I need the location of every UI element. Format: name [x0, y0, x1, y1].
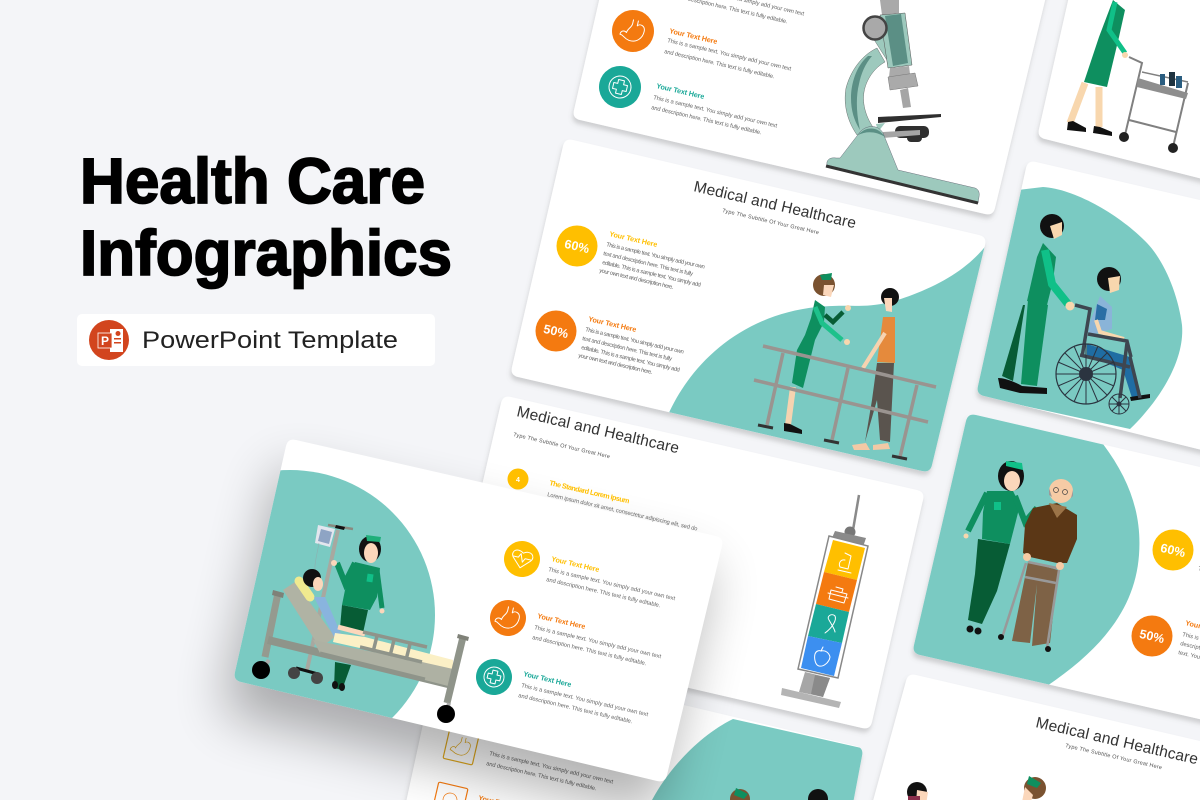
icon: apple [815, 647, 830, 666]
teal shape [640, 719, 870, 800]
text: teal item: Your Text Here [523, 669, 572, 689]
text: orange item: This is a sample text. You simply add your own text [534, 625, 662, 660]
illustration: nurse and patient at parallel bars [754, 273, 936, 459]
panel: syringe slide [450, 397, 923, 728]
text: orange item: This is a sample text. You simply add your own text [667, 38, 792, 73]
heading: Medical and Healthcare [1034, 714, 1200, 768]
panel: elderly care slide [905, 411, 1200, 726]
text: orange item: and description here. This text is fully editable. [532, 635, 647, 667]
text: orange item: Your Text Here [537, 611, 586, 631]
text: teal item [651, 81, 778, 136]
panel: wheelchair slide [970, 162, 1200, 457]
text: orange item: and description here. This text is fully editable. [664, 49, 775, 80]
illustration: syringe [781, 495, 868, 708]
stat: 60%: 60% [1159, 541, 1187, 560]
text: orange item: This is a sample text. You simply add your own [585, 327, 684, 356]
icon: cross circle [472, 655, 516, 699]
icon: microscope [838, 553, 851, 573]
text: teal item: This is a sample text. You simply add your own text [521, 683, 649, 718]
text: lower item: and description here. This text is fully editable. [486, 761, 597, 792]
illustration: nurse and elderly man with walker [964, 461, 1077, 652]
stat: 60% [556, 226, 598, 266]
icon: PowerPoint logo [89, 320, 129, 360]
teal shape [905, 411, 1139, 686]
badge: PowerPoint Template: PowerPoint Template [142, 327, 398, 354]
text: orange item: editable. This is a sample text. You simply add [581, 345, 680, 374]
icon: outlined stomach square [443, 729, 479, 765]
text: yellow item: Your Text Here [551, 554, 600, 574]
icon: teal cross circle [595, 62, 645, 112]
teal wave shape [668, 240, 990, 480]
teal circle [234, 470, 435, 718]
icon: outlined cross square [432, 782, 468, 800]
heading: Type The Subtitle Of Your Great Here [722, 208, 819, 236]
text: teal item: This is a sample text. You simply add your own text [653, 95, 778, 130]
text: orange item: Your Text Here [669, 26, 718, 46]
icon: ribbon [825, 615, 835, 633]
text: yellow item: editable. This is a sample text. You simply add [602, 260, 701, 289]
text: yellow item [599, 229, 705, 291]
title: Health Care Infographics: Health Care [80, 145, 425, 217]
title: Health Care Infographics [80, 145, 452, 289]
shadow: front slide [222, 468, 712, 800]
text: lower item: This is a sample text. You simply add your own text [489, 751, 614, 786]
heading: Medical and Healthcare [692, 178, 858, 232]
text: teal item: and description here. This text is fully editable. [651, 105, 762, 136]
heading: syringe slide: Type The Subtitle Of Your Great Here [513, 432, 610, 460]
illustration: figures [907, 776, 1120, 800]
text: standard lorem ipsum: The Standard Lorem Ipsum [549, 478, 630, 505]
stat: 60% [1152, 530, 1194, 570]
text: yellow item: text and description here. This text is fully [603, 251, 694, 278]
text: stat descriptions [1178, 530, 1200, 665]
text: orange item: your own text and description here. [578, 353, 653, 376]
text: yellow item: and description here. This text is fully editable. [546, 577, 661, 609]
text: teal item [518, 669, 649, 725]
text: teal item: and description here. This text is fully editable. [518, 693, 633, 725]
panel: microscope slide [574, 0, 1050, 214]
text: yellow item: This is a sample text. You simply add your own text [548, 567, 676, 602]
stat: 50%: 50% [1138, 627, 1166, 646]
stat: 50%: 50% [542, 322, 570, 341]
stat: 50% [536, 310, 576, 352]
text: orange item [532, 611, 662, 667]
stat: number 4 [508, 468, 528, 490]
text: yellow item: your own text and description here. [599, 268, 674, 291]
stat: number 4: 4 [516, 477, 520, 484]
panel: rehabilitation slide [512, 140, 990, 480]
text: orange item [578, 314, 684, 376]
panel: lower slide with teal shape [404, 706, 863, 800]
text: yellow item [546, 554, 676, 609]
icon: stomach circle [486, 596, 530, 640]
icon: orange stomach circle [608, 6, 658, 56]
icon: heart circle [500, 537, 544, 581]
stat: 50% [1132, 616, 1172, 656]
illustration: nurse and patient in bed [252, 525, 469, 723]
teal shape [970, 187, 1182, 429]
text: yellow item: This is a sample text. You simply add your own [606, 242, 705, 271]
heading: Type The Subtitle Of Your Great Here [1065, 743, 1162, 771]
illustration: figures on teal shape [730, 788, 828, 800]
heading: syringe slide: Medical and Healthcare [515, 403, 681, 457]
title: Health Care Infographics: Infographics [80, 217, 452, 289]
text: orange item [664, 26, 792, 80]
text: orange item: Your Text Here [588, 314, 637, 334]
text: standard lorem ipsum: Lorem ipsum dolor sit amet, consectetur adipiscing elit, sed do [547, 492, 698, 533]
text: orange item: text and description here. This text is fully [582, 336, 673, 363]
icon: first aid kit [828, 587, 848, 603]
panel: trolley slide [1039, 0, 1200, 186]
illustration: nurse with trolley [1067, 0, 1188, 153]
badge: PowerPoint Template [77, 314, 435, 366]
illustration: microscope [826, 0, 979, 203]
illustration: carer pushing wheelchair [998, 214, 1150, 414]
icon: PowerPoint logo: P [101, 334, 109, 348]
text: yellow item: Your Text Here [609, 229, 658, 249]
panel: bottom right slide [865, 675, 1200, 800]
stat: 60%: 60% [563, 237, 591, 256]
panel: front hospital bed slide [234, 440, 720, 782]
text: teal item: Your Text Here [656, 81, 705, 101]
